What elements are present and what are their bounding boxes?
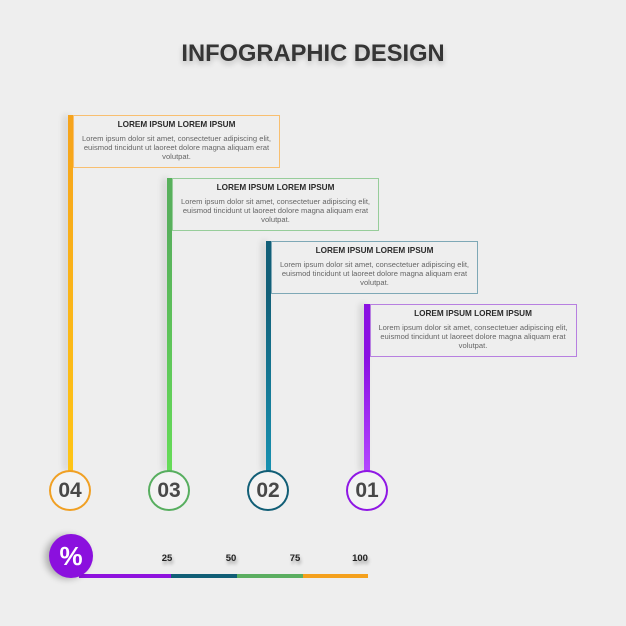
- step 04 text box: LOREM IPSUM LOREM IPSUM: [118, 120, 235, 129]
- panel: step 03: [148, 178, 379, 511]
- step 02 text box: Lorem ipsum dolor sit amet, consectetuer adipiscing elit, euismod tincidunt ut laoreet dolore magna aliquam erat volutpat.: [280, 260, 469, 287]
- step 01 text box: [370, 304, 576, 357]
- panel: step 04: [49, 114, 280, 511]
- scale label 25: 25: [162, 552, 172, 564]
- panel: step 02: [247, 240, 478, 511]
- step 02 vertical bar: [266, 241, 271, 471]
- step 03 text box: [172, 178, 379, 231]
- step 03 text box: Lorem ipsum dolor sit amet, consectetuer adipiscing elit, euismod tincidunt ut laoreet dolore magna aliquam erat volutpat.: [181, 197, 370, 224]
- step 03 number circle: 03: [157, 479, 181, 502]
- scale label 100: 100: [352, 552, 368, 564]
- step 04 text box: Lorem ipsum dolor sit amet, consectetuer adipiscing elit, euismod tincidunt ut laoreet dolore magna aliquam erat volutpat.: [82, 134, 271, 161]
- step 03 number circle: [148, 470, 190, 511]
- step 02 number circle: 02: [256, 479, 280, 502]
- step 01 vertical bar: [364, 304, 370, 471]
- step 04 text box: [73, 115, 280, 168]
- scale label 75: 75: [290, 552, 300, 564]
- percentage scale: [42, 532, 368, 582]
- step 01 text box: Lorem ipsum dolor sit amet, consectetuer adipiscing elit, euismod tincidunt ut laoreet dolore magna aliquam erat volutpat.: [378, 323, 568, 350]
- step 02 text box: [271, 241, 478, 294]
- scale label 50: 50: [226, 552, 236, 564]
- panel: step 01: [346, 303, 577, 511]
- step 02 number circle: [247, 470, 289, 511]
- step 04 number circle: [49, 470, 91, 511]
- step 01 number circle: [346, 470, 388, 511]
- title: INFOGRAPHIC DESIGN: [181, 41, 445, 67]
- icon: percent badge: %: [59, 541, 83, 571]
- icon: percent badge: [49, 534, 93, 578]
- step 03 vertical bar: [167, 178, 172, 471]
- step 01 text box: LOREM IPSUM LOREM IPSUM: [414, 309, 532, 318]
- step 03 text box: LOREM IPSUM LOREM IPSUM: [217, 183, 334, 192]
- step 01 number circle: 01: [355, 479, 379, 502]
- step 04 number circle: 04: [58, 479, 82, 502]
- step 02 text box: LOREM IPSUM LOREM IPSUM: [316, 246, 433, 255]
- scale bar: [79, 574, 368, 578]
- step 04 vertical bar: [68, 115, 73, 471]
